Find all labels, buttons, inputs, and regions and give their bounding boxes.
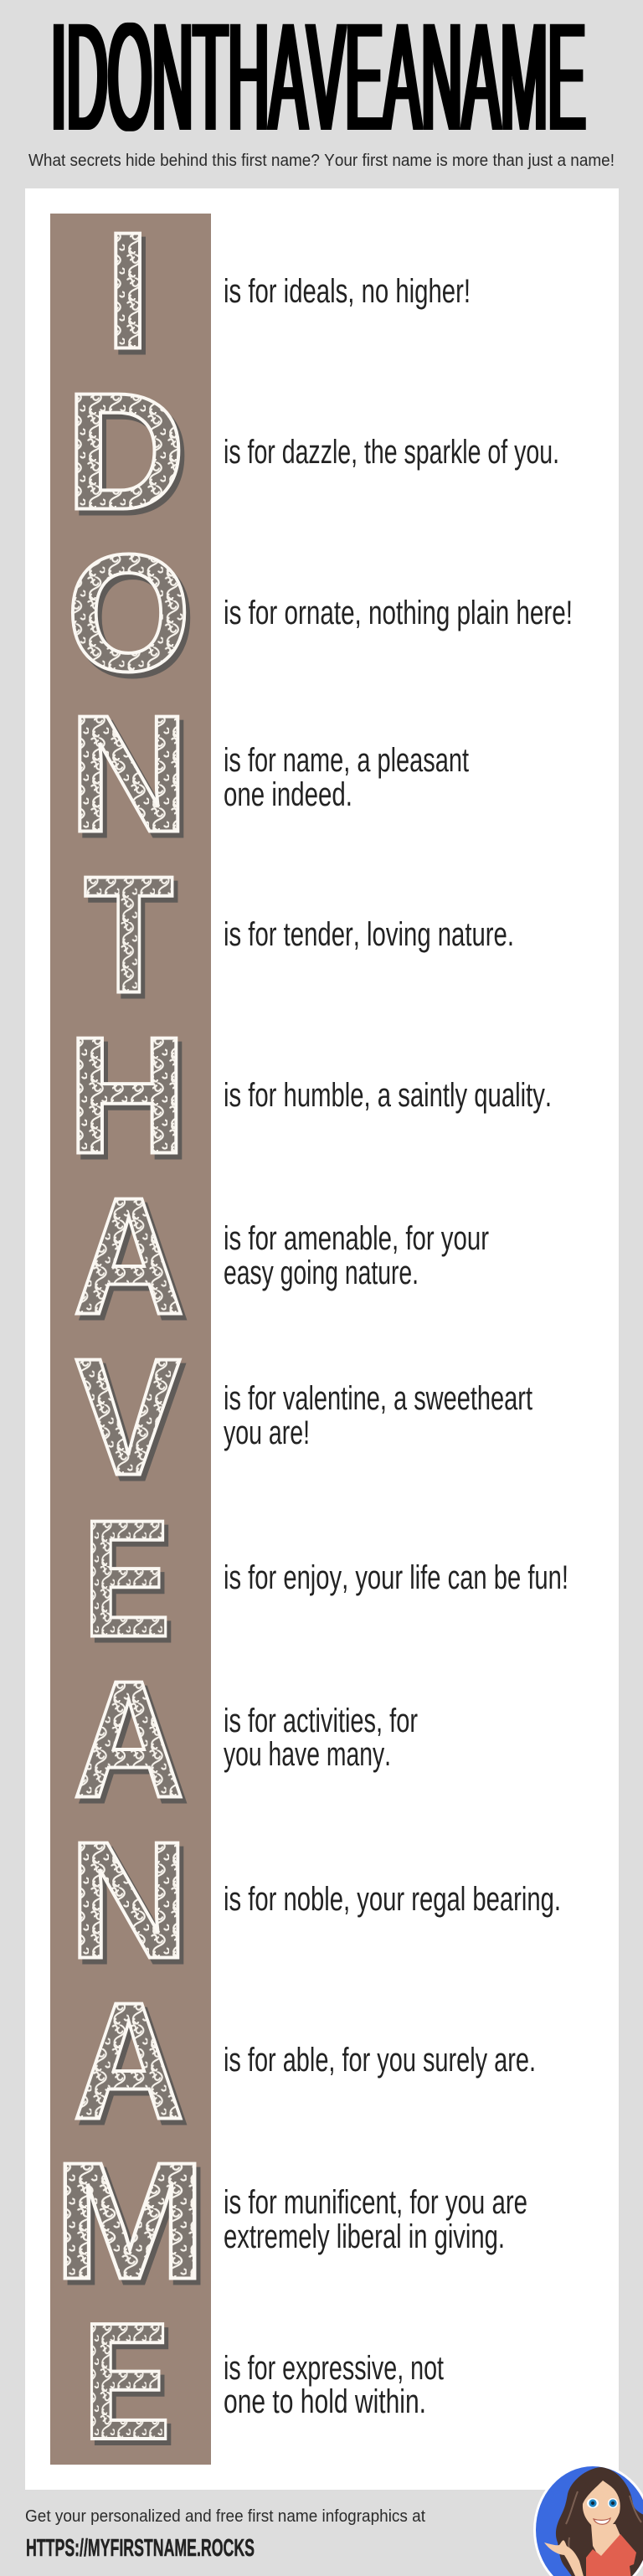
letter T: T: [88, 846, 178, 1033]
letter T: T: [84, 841, 174, 1028]
caption A: is for amenable, for your: [224, 1220, 489, 1257]
caption T: is for tender, loving nature.: [224, 916, 514, 953]
letter E: E: [87, 2294, 175, 2480]
letter H: H: [67, 1003, 188, 1189]
caption N: one indeed.: [224, 776, 352, 813]
caption E: [224, 2350, 444, 2420]
letter E: E: [83, 2289, 171, 2475]
caption M: extremely liberal in giving.: [224, 2218, 505, 2255]
footer url: HTTPS://MYFIRSTNAME.ROCKS: [26, 2535, 255, 2562]
letter A: A: [77, 1972, 189, 2159]
letter A: A: [73, 1646, 185, 1832]
caption A: is for able, for you surely are.: [224, 2042, 536, 2079]
letter N: N: [69, 1807, 189, 1993]
caption E: is for expressive, not: [224, 2350, 444, 2387]
letter A: A: [73, 1162, 185, 1349]
letter A: A: [77, 1651, 189, 1837]
caption V: you are!: [224, 1414, 310, 1451]
letter N: N: [73, 1812, 193, 1998]
letter V: V: [80, 1329, 185, 1516]
letter N: N: [69, 682, 189, 868]
letter E: E: [87, 1492, 175, 1677]
caption A: easy going nature.: [224, 1255, 419, 1291]
letter O: O: [70, 525, 195, 711]
letter M: M: [57, 2133, 211, 2319]
caption V: is for valentine, a sweetheart: [224, 1380, 532, 1417]
letter N: N: [73, 687, 193, 873]
letter O: O: [66, 520, 191, 706]
panel: brown letter column: [50, 214, 211, 2465]
letter A: A: [77, 1167, 189, 1354]
letter E: E: [83, 1486, 171, 1672]
letter D: D: [69, 363, 190, 549]
footer text: Get your personalized and free first name infographics at: [25, 2507, 425, 2526]
letter A: A: [73, 1967, 185, 2154]
caption N: [224, 742, 469, 813]
letter I: I: [105, 198, 151, 384]
caption M: is for munificent, for you are: [224, 2184, 527, 2221]
caption N: is for name, a pleasant: [224, 742, 469, 779]
letter M: M: [53, 2128, 207, 2314]
caption E: one to hold within.: [224, 2383, 426, 2420]
letter D: D: [65, 358, 186, 544]
caption I: is for ideals, no higher!: [224, 273, 471, 310]
caption A: you have many.: [224, 1736, 391, 1773]
icon: avatar: [533, 2464, 643, 2576]
letter I: I: [109, 203, 155, 389]
caption A: [224, 1703, 418, 1773]
caption M: [224, 2184, 527, 2255]
subtitle: What secrets hide behind this first name? Your first name is more than just a name!: [28, 152, 615, 170]
caption A: [224, 1220, 489, 1291]
letter H: H: [71, 1008, 192, 1194]
caption V: [224, 1380, 532, 1451]
letter V: V: [75, 1324, 181, 1511]
caption A: is for activities, for: [224, 1703, 418, 1739]
